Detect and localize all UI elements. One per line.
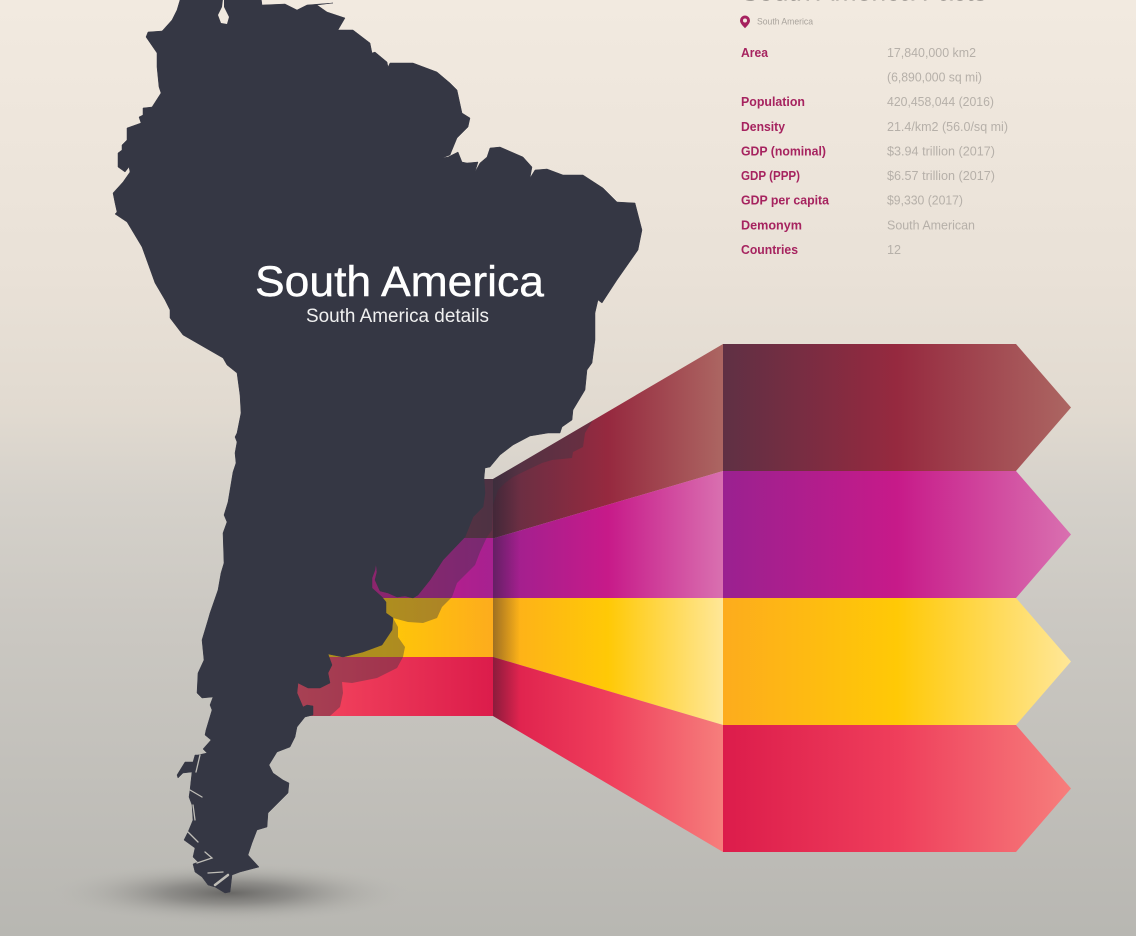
ribbon band: red xyxy=(296,657,1071,852)
map title xyxy=(255,258,544,327)
ribbon band: maroon xyxy=(296,344,1071,538)
facts panel xyxy=(740,0,1008,257)
row: Population: Population xyxy=(741,94,805,109)
continental shelf overlay xyxy=(296,420,593,716)
row: Demonym: Demonym xyxy=(741,218,802,232)
row: Population: 420,458,044 (2016) xyxy=(887,94,994,109)
row: Demonym xyxy=(741,218,975,232)
row: GDP PPP: GDP (PPP) xyxy=(741,168,800,183)
subheading: South America details xyxy=(306,306,489,327)
location label: South America xyxy=(757,16,814,28)
ribbon band: magenta xyxy=(296,471,1071,598)
row: Demonym: South American xyxy=(887,218,975,232)
lake and gulf cut-out xyxy=(218,0,229,24)
row: Density: 21.4/km2 (56.0/sq mi) xyxy=(887,119,1008,134)
row: Countries: Countries xyxy=(741,242,798,257)
fold shadow xyxy=(493,463,520,732)
row: GDP nominal: $3.94 trillion (2017) xyxy=(887,144,995,158)
row: Area: (6,890,000 sq mi) xyxy=(887,70,982,84)
row: GDP per capita: GDP per capita xyxy=(741,192,830,208)
row: Countries xyxy=(741,242,901,257)
Tierra del Fuego strait xyxy=(215,875,228,885)
row: Area: Area xyxy=(741,45,769,60)
row: GDP per capita xyxy=(741,192,963,208)
folded ribbon chart xyxy=(296,344,1071,852)
row: GDP per capita: $9,330 (2017) xyxy=(887,192,963,208)
row: Area: 17,840,000 km2 xyxy=(887,45,976,60)
row: GDP nominal: GDP (nominal) xyxy=(741,144,826,158)
row: GDP PPP: $6.57 trillion (2017) xyxy=(887,168,995,183)
ribbon band: yellow xyxy=(296,598,1071,725)
row: GDP PPP xyxy=(741,168,995,183)
row: Area xyxy=(741,45,982,84)
row: Countries: 12 xyxy=(887,242,901,257)
row: GDP nominal xyxy=(741,144,995,158)
map ground shadow xyxy=(48,862,412,924)
map: South America silhouette xyxy=(113,0,642,893)
row: Population xyxy=(741,94,994,109)
icon: location pin xyxy=(740,16,750,28)
heading: South America: South America xyxy=(255,258,544,306)
row: Density xyxy=(741,119,1008,134)
Patagonian fjord cut-outs xyxy=(188,755,223,873)
row: Density: Density xyxy=(741,119,786,134)
